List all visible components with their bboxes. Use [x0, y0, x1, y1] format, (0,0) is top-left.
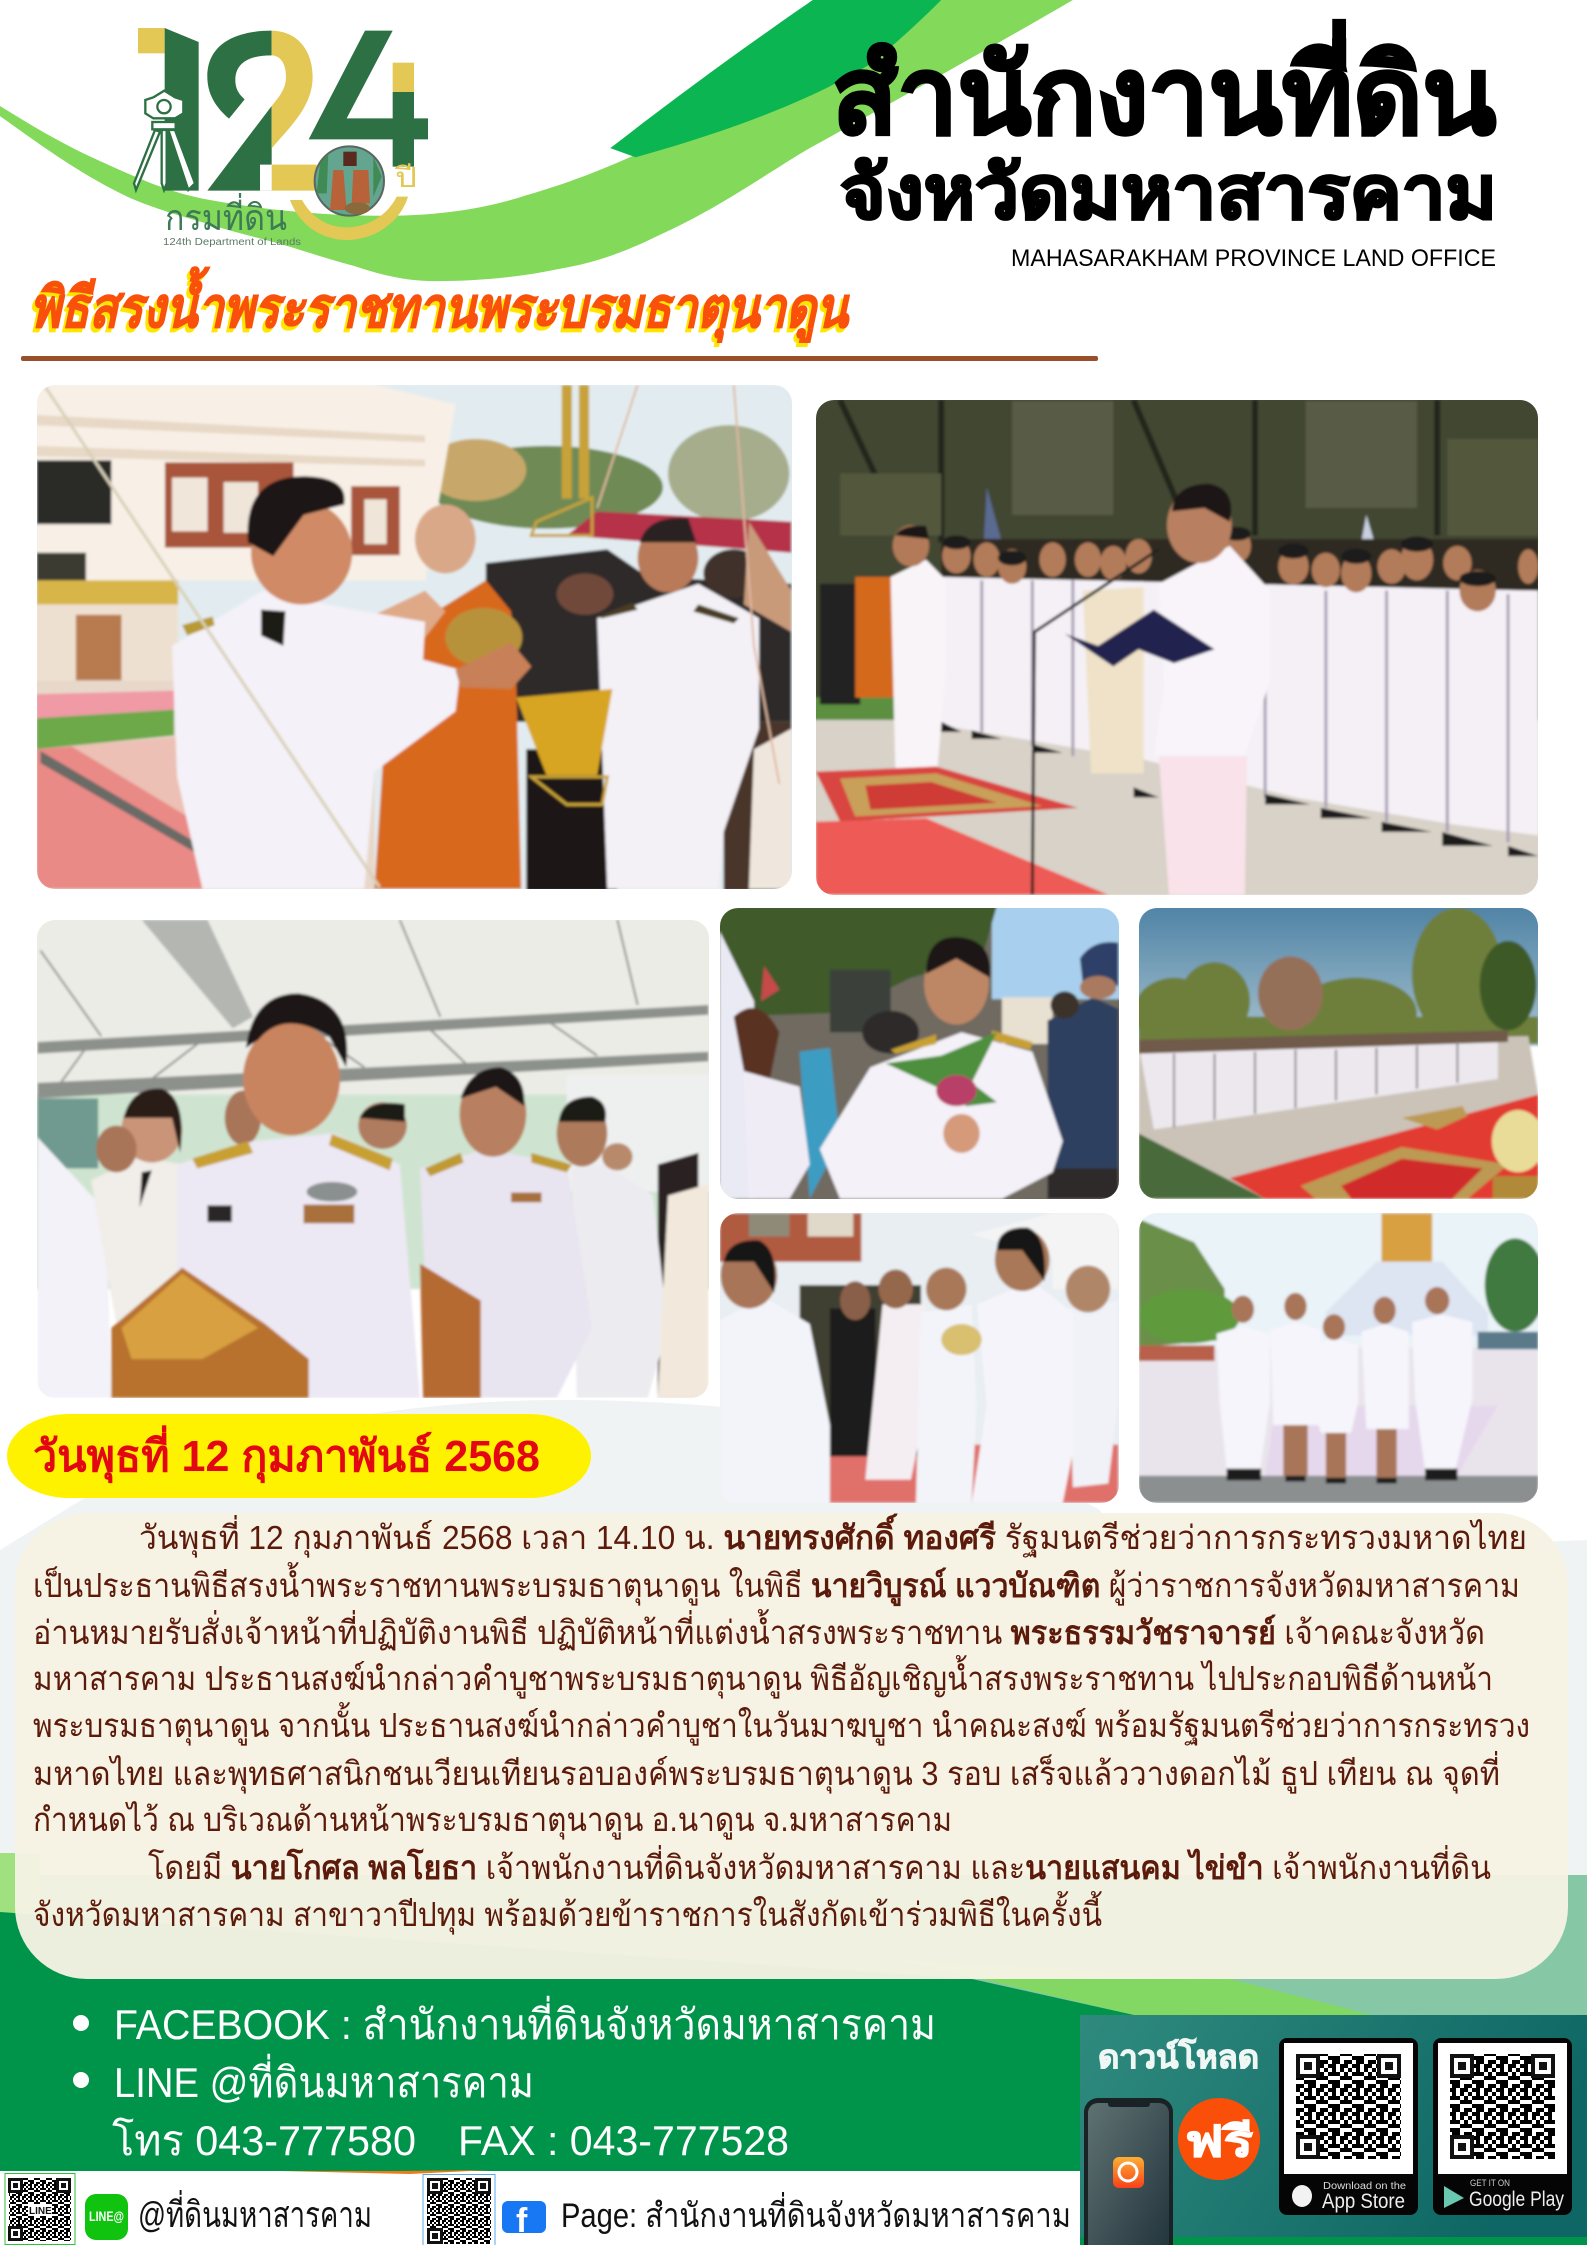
card: App Store QR: App Store [1322, 2190, 1405, 2213]
card: App Store QR: Download on the [1323, 2181, 1406, 2192]
icon: apple [1292, 2185, 1312, 2207]
download heading: ดาวน์โหลด [1098, 2038, 1259, 2075]
title: province: จังหวัดมหาสารคาม [840, 151, 1497, 234]
photo: pouring ceremonial water [30, 384, 800, 891]
logo caption: 124th Department of Lands [163, 237, 301, 248]
card: Google Play QR: Google Play [1469, 2188, 1564, 2211]
date pill: วันพุธที่ 12 กุมภาพันธ์ 2568 [33, 1425, 540, 1484]
title: english: MAHASARAKHAM PROVINCE LAND OFFICE [1011, 245, 1496, 272]
photo: five officials before stupa [1134, 1211, 1545, 1503]
card: Google Play QR: GET IT ON [1470, 2178, 1510, 2188]
heading underline [21, 356, 1098, 361]
icon: LINE: LINE@ [89, 2208, 124, 2224]
contact list [73, 1996, 936, 2164]
text panel [15, 1513, 1568, 1979]
icon: LINE [85, 2194, 128, 2240]
heading: ceremony name [27, 266, 850, 347]
photo: procession with flowers [714, 1211, 1128, 1507]
contact list: FAX : 043-777528 [458, 2117, 789, 2164]
logo years mark: ปี [394, 162, 417, 193]
text panel: มหาดไทย และพุทธศาสนิกชนเวียนเทียนรอบองค์พระบรมธาตุนาดูน 3 รอบ เสร็จแล้ววางดอกไม้ ธูป เทียน ณ จุดที่ [33, 1751, 1500, 1794]
dark green ribbon [610, 0, 941, 157]
QR: LINE [5, 2174, 75, 2244]
text panel: กำหนดไว้ ณ บริเวณด้านหน้าพระบรมธาตุนาดูน อ.นาดูน จ.มหาสารคาม [33, 1801, 952, 1840]
download panel [1080, 2015, 1587, 2245]
green swoosh [0, 0, 1073, 281]
QR: Facebook [423, 2174, 495, 2245]
text panel: โดยมี นายโกศล พลโยธา เจ้าพนักงานที่ดินจังหวัดมหาสารคาม และนายแสนคม ไข่ขำ เจ้าพนักงานที่ดิน [148, 1845, 1491, 1886]
Facebook page: Page: สำนักงานที่ดินจังหวัดมหาสารคาม [561, 2192, 1071, 2235]
photo: officials standing in formation [810, 398, 1549, 896]
text panel: อ่านหมายรับสั่งเจ้าหน้าที่ปฏิบัติงานพิธี ปฏิบัติหน้าที่แต่งน้ำสรงพระราชทาน พระธรรมวัชราจารย์ เจ้าคณะจังหวัด [33, 1609, 1485, 1651]
logo wordmark: กรมที่ดิน [165, 193, 287, 238]
text panel: เป็นประธานพิธีสรงน้ำพระราชทานพระบรมธาตุนาดูน ในพิธี นายวิบูรณ์ แววบัณฑิต ผู้ว่าราชการจังหวัดมหาสารคาม [33, 1562, 1520, 1607]
QR: LINE: LINE [29, 2206, 52, 2217]
photo: officials seated under tent [30, 918, 719, 1398]
contact list: LINE @ที่ดินมหาสารคาม [114, 2054, 534, 2106]
text panel: วันพุธที่ 12 กุมภาพันธ์ 2568 เวลา 14.10 น. นายทรงศักดิ์ ทองศรี รัฐมนตรีช่วยว่าการกระทรวงมหาดไทย [139, 1513, 1527, 1558]
logo: 124 years [134, 28, 428, 240]
card: App Store QR [1279, 2038, 1418, 2215]
title: office name: สำนักงานที่ดิน [832, 20, 1496, 156]
icon: phone [1084, 2098, 1173, 2245]
icon: Facebook: f [516, 2202, 528, 2240]
contact list: โทร 043-777580 [112, 2116, 416, 2164]
white contact bar [0, 2170, 1081, 2245]
text panel: จังหวัดมหาสารคาม สาขาวาปีปทุม พร้อมด้วยข้าราชการในสังกัดเข้าร่วมพิธีในครั้งนี้ [33, 1891, 1103, 1935]
icon: play [1444, 2186, 1464, 2208]
yellow arc [290, 197, 408, 240]
icon: theodolite [134, 91, 195, 190]
photo: formation across red carpet [1134, 906, 1544, 1199]
badge: free: ฟรี [1185, 2118, 1254, 2165]
LINE handle: @ที่ดินมหาสารคาม [138, 2190, 372, 2235]
emblem: provincial seal [315, 146, 384, 216]
card: Google Play QR [1433, 2038, 1572, 2215]
badge: free [1178, 2098, 1260, 2180]
date pill [7, 1414, 591, 1498]
heading: ceremony name: พิธีสรงน้ำพระราชทานพระบรมธาตุนาดูน [27, 270, 847, 347]
heading: ceremony name: พิธีสรงน้ำพระราชทานพระบรมธาตุนาดูน [30, 266, 850, 343]
photo: official holding flowers [714, 906, 1128, 1201]
contact list: FACEBOOK : สำนักงานที่ดินจังหวัดมหาสารคาม [114, 1996, 936, 2048]
icon: Facebook [502, 2201, 546, 2240]
